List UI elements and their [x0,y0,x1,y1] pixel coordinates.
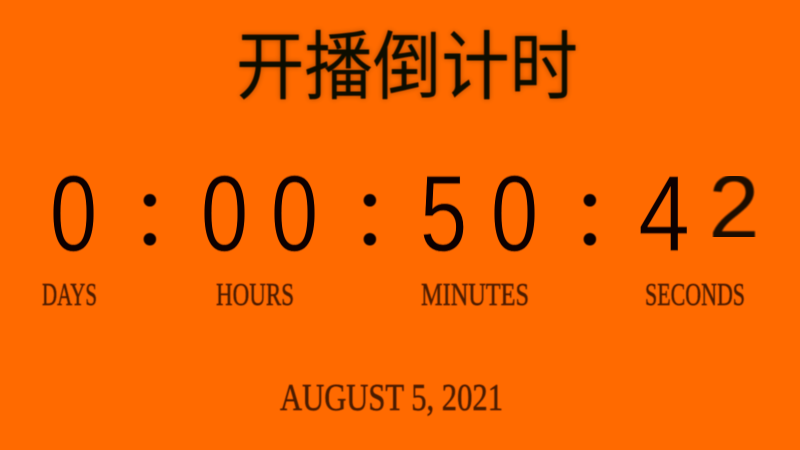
hours digits: 0 [201,153,248,274]
hours digits: 0 [271,153,318,274]
label: minutes: MINUTES [421,276,529,312]
label: hours: HOURS [216,276,294,312]
label: days: DAYS [42,276,97,312]
date: AUGUST 5, 2021 [280,377,503,419]
seconds digits [640,176,756,252]
countdown infographic [42,28,756,416]
minutes digits: 0 [491,153,538,274]
minutes digits: 5 [420,153,467,274]
colon 3: : [575,150,605,267]
label: seconds: SECONDS [645,276,745,312]
seconds digits: 4 [638,153,690,275]
colon 2: : [355,150,385,267]
title: 开播倒计时 [236,25,578,109]
seconds digits: 2 [708,158,760,258]
colon 1: : [135,150,165,267]
hours digits [201,153,318,274]
minutes digits [420,153,538,274]
days digit: 0 [50,153,97,274]
